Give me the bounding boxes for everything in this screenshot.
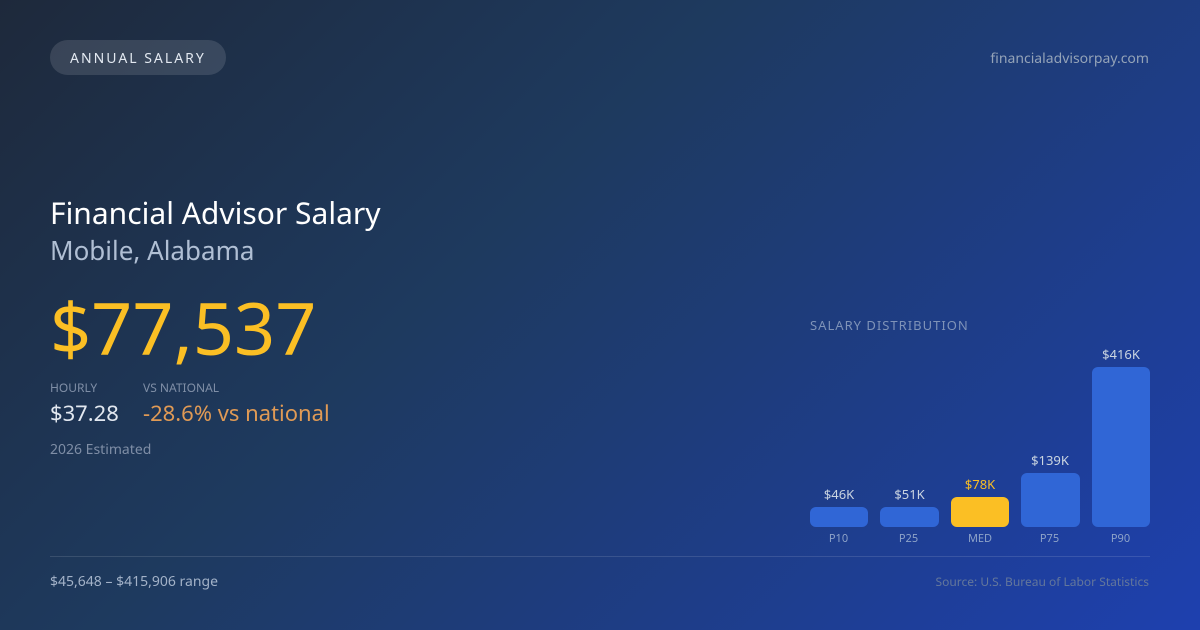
bar: P10: P10 [829,531,848,546]
bar: P25: P25 [899,531,918,546]
stat: vs national [143,379,330,428]
bar: median: $78K [965,475,995,493]
bar: P10: $46K [824,485,854,503]
salary range: $45,648 – $415,906 range [50,572,218,591]
chart heading: SALARY DISTRIBUTION [810,316,969,334]
bar: P90: P90 [1111,531,1130,546]
bar: median [951,475,1009,546]
stat: vs national: -28.6% vs national [143,398,330,428]
source: Source: U.S. Bureau of Labor Statistics [936,573,1149,590]
estimate note: 2026 Estimated [50,440,151,459]
subtitle: location: Mobile, Alabama [50,232,254,268]
bar: P90: $416K [1102,345,1140,363]
bar: P75: P75 [1040,531,1059,546]
stat: vs national: VS NATIONAL [143,379,219,396]
stat: hourly: $37.28 [50,398,119,428]
bar: P90 [1092,345,1150,546]
stat: hourly: HOURLY [50,379,97,396]
bar: P25 [880,485,939,546]
bar: P75: $139K [1031,451,1069,469]
bar: P25: $51K [894,485,925,503]
bar chart: salary distribution [810,345,1150,546]
badge: annual salary: ANNUAL SALARY [70,49,206,68]
bar: P10 [810,485,868,546]
badge: annual salary [50,40,226,75]
bar: P75 [1021,451,1080,546]
bar: median: MED [968,531,992,546]
main salary figure: $77,537 [50,279,316,377]
title: Financial Advisor Salary [50,192,381,233]
site domain: financialadvisorpay.com [990,49,1149,68]
stat: hourly [50,379,119,428]
